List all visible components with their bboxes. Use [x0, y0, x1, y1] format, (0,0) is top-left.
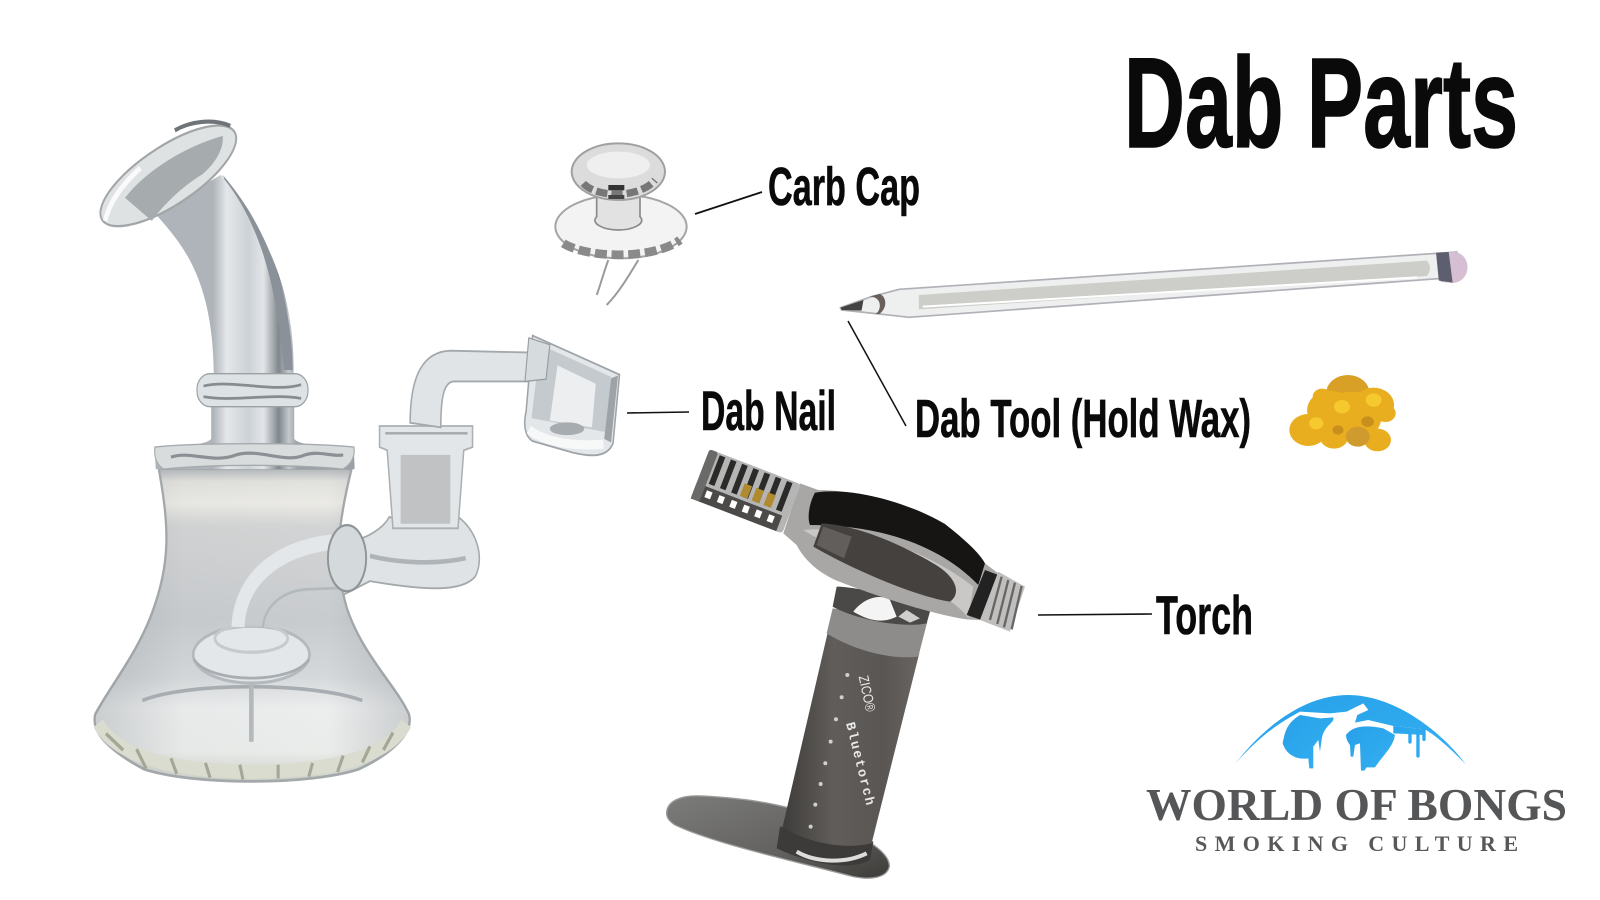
- tool end ball: [1441, 252, 1467, 283]
- carb cap stem: [595, 193, 642, 230]
- logo wordmark: WORLD OF BONGS: [1146, 779, 1567, 830]
- bong base rim: [98, 687, 406, 779]
- line: torch: [1038, 614, 1152, 615]
- dab nail: [410, 336, 620, 455]
- torch model text: Bluetorch: [841, 721, 876, 807]
- carb cap illustration: [555, 143, 687, 305]
- logo: world of bongs: [1146, 695, 1567, 856]
- wax concentrate: [1289, 375, 1396, 451]
- label: dab tool: Dab Tool (Hold Wax): [915, 389, 1251, 449]
- torch handle dots: [809, 673, 849, 829]
- bong neck dark reflection: [223, 175, 293, 370]
- label: torch: Torch: [1156, 584, 1253, 646]
- torch illustration: [667, 449, 1025, 878]
- torch base plate: [667, 796, 889, 878]
- bong shoulder band: [155, 444, 354, 469]
- bong female joint: [380, 426, 473, 528]
- tool inner rod: [919, 261, 1430, 309]
- bong neck ring: [197, 374, 308, 407]
- torch foot collar: [777, 827, 873, 866]
- carb cap lower disk: [555, 195, 687, 258]
- bong inner percolator: [193, 542, 339, 742]
- tool glass shaft: [841, 252, 1457, 317]
- label: dab nail: Dab Nail: [701, 379, 836, 442]
- water pipe joint arm: [339, 517, 479, 595]
- torch head top lobe: [809, 491, 985, 585]
- bong neck: [156, 175, 294, 375]
- bong mouthpiece flare: [90, 106, 247, 245]
- dab tool illustration: [841, 252, 1467, 317]
- torch brand text: ZICO®: [856, 674, 879, 714]
- carb cap tail: [597, 260, 638, 305]
- line: dab nail: [627, 412, 689, 413]
- logo tagline: SMOKING CULTURE: [1195, 831, 1518, 856]
- torch grip pad: [813, 523, 956, 602]
- line: dab tool: [848, 321, 906, 426]
- carb cap upper disk: [572, 143, 665, 200]
- torch adjustment knob: [967, 570, 1025, 632]
- tool tip: [841, 300, 863, 311]
- bong body side shading: [95, 469, 410, 781]
- bong illustration: [90, 106, 620, 781]
- torch chrome neck: [833, 587, 930, 625]
- torch head silver sweep: [803, 529, 973, 618]
- torch handle: [783, 630, 919, 846]
- label: carb cap: Carb Cap: [768, 157, 920, 217]
- line: carb cap: [695, 192, 762, 214]
- torch head: [783, 483, 998, 620]
- torch barrel: [691, 449, 801, 533]
- torch handle collar: [827, 608, 927, 657]
- bong body: [95, 469, 410, 781]
- logo globe: [1235, 695, 1466, 771]
